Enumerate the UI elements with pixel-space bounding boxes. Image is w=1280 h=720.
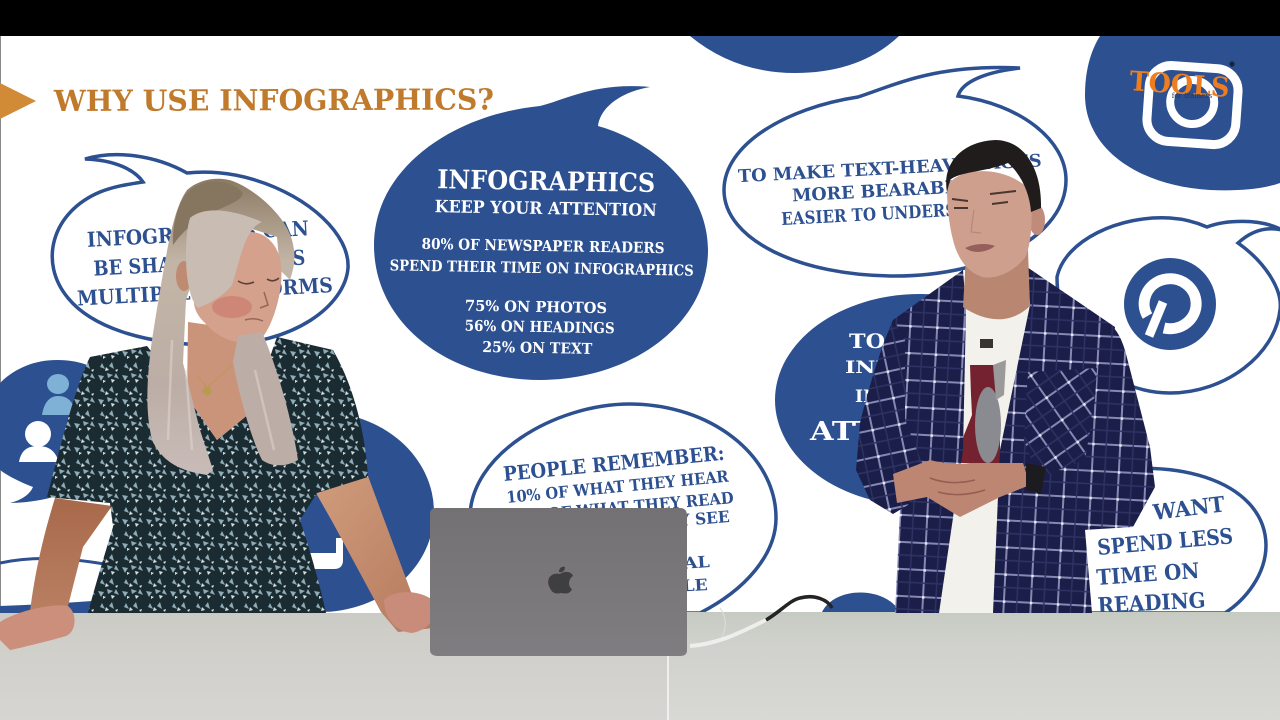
bubble: lower left partial bbox=[0, 558, 110, 614]
icon: users bbox=[19, 374, 76, 462]
bubble text: 80% OF WHAT THEY SEE bbox=[510, 507, 730, 543]
eyes bbox=[238, 278, 279, 284]
bubble text: READING bbox=[1097, 588, 1206, 619]
person: man bbox=[856, 140, 1155, 613]
forearms and hands bbox=[893, 460, 1030, 517]
hair bbox=[147, 179, 294, 475]
bubble text bbox=[388, 164, 695, 360]
sleeve: right bbox=[1040, 318, 1155, 530]
bubble text: 20% OF WHAT THEY READ bbox=[508, 488, 734, 527]
hair: bang bbox=[186, 210, 262, 308]
hair: crown bbox=[173, 182, 243, 245]
icon: pinterest bbox=[1124, 258, 1216, 350]
hair bbox=[946, 140, 1041, 212]
bubble text: TO bbox=[849, 329, 885, 353]
necklace bbox=[198, 365, 232, 396]
bubble text: EASIER TO UNDERSTAND bbox=[781, 198, 1006, 230]
arrow marker bbox=[0, 83, 36, 119]
nose bbox=[971, 210, 981, 233]
dress bbox=[47, 337, 368, 613]
bubble text: IN bbox=[855, 387, 879, 407]
bubble text bbox=[73, 215, 333, 310]
bubble: pinterest bbox=[1057, 218, 1280, 393]
cheek bbox=[212, 296, 252, 318]
top black bar bbox=[0, 0, 1280, 36]
bubble text: INF bbox=[845, 358, 891, 378]
bubble: spend less time bbox=[1075, 468, 1266, 619]
bubble: shared on multiple platforms bbox=[52, 155, 348, 345]
mouth bbox=[965, 244, 995, 252]
bubble: attention bbox=[775, 294, 1065, 506]
bubble: bottom center fragment bbox=[822, 592, 900, 612]
table bbox=[0, 612, 1280, 720]
t-shirt bbox=[938, 307, 1030, 613]
bubble text: PEOPLE REMEMBER: bbox=[502, 441, 725, 486]
bubble text: SPEND LESS bbox=[1096, 524, 1234, 561]
person: woman bbox=[0, 179, 437, 650]
bubble text: 80% OF NEWSPAPER READERS bbox=[421, 235, 665, 257]
bubble text: 75% ON PHOTOS bbox=[465, 297, 607, 317]
bubble text: VISUAL bbox=[633, 552, 710, 576]
icon fragment bbox=[300, 538, 343, 569]
logo: tools: for trainers bbox=[1172, 92, 1213, 100]
bubble: instagram bbox=[1085, 36, 1280, 190]
face bbox=[947, 171, 1032, 278]
bubble text bbox=[809, 329, 891, 447]
neck and chest bbox=[187, 322, 250, 440]
icon: instagram bbox=[1145, 64, 1240, 146]
bubble text: SPEND THEIR TIME ON INFOGRAPHICS bbox=[390, 256, 694, 280]
bubble: social users bbox=[0, 360, 90, 503]
bubble text: TO MAKE TEXT-HEAVY PAGES bbox=[738, 151, 1042, 187]
bubble text: KEEP YOUR ATTENTION bbox=[435, 197, 657, 221]
bubble: people remember bbox=[470, 404, 776, 613]
sleeve: left bbox=[856, 320, 925, 514]
shirt: left panel bbox=[885, 270, 966, 613]
bubble: keep your attention bbox=[374, 86, 708, 380]
pocket: right bbox=[1024, 368, 1110, 478]
bubble: behind woman bbox=[206, 412, 434, 612]
hair: right strand bbox=[233, 332, 298, 465]
bubble text: MULTIPLE PLATFORMS bbox=[76, 273, 333, 310]
bubble text: INFOGRAPHICS bbox=[437, 165, 655, 199]
face bbox=[194, 232, 282, 343]
hand: left bbox=[0, 605, 75, 650]
bubble text: MORE BEARABLE & bbox=[792, 176, 993, 206]
bubble text: INFOGRAPHICS CAN bbox=[86, 216, 309, 252]
bubble: top partial bbox=[690, 36, 899, 73]
bubble text bbox=[738, 151, 1045, 232]
left arm bbox=[30, 498, 112, 612]
nose and mouth bbox=[245, 292, 268, 321]
bubble text: WANT bbox=[1151, 492, 1226, 526]
bubble text: PEOPLE bbox=[627, 575, 708, 598]
cable bbox=[690, 597, 832, 646]
bubble text bbox=[1096, 492, 1234, 619]
neck bbox=[963, 250, 1030, 319]
bubble text: TIME ON bbox=[1096, 559, 1200, 591]
bubble text: 56% ON HEADINGS bbox=[465, 317, 615, 337]
shirt: right panel bbox=[993, 267, 1115, 613]
apple logo bbox=[548, 567, 573, 594]
ear bbox=[176, 261, 192, 291]
bubble text bbox=[502, 441, 734, 598]
right arm bbox=[316, 476, 437, 632]
watch bbox=[1026, 463, 1046, 494]
bubble text: 10% OF WHAT THEY HEAR bbox=[506, 467, 730, 507]
title: WHY USE INFOGRAPHICS? bbox=[53, 82, 494, 118]
shirt print bbox=[957, 339, 1006, 463]
bubble text: 25% ON TEXT bbox=[482, 338, 593, 358]
hand: right bbox=[384, 592, 437, 633]
laptop bbox=[430, 508, 687, 656]
ear bbox=[1029, 205, 1045, 235]
bubble: text-heavy pages bbox=[724, 68, 1066, 276]
bubble text: ATT bbox=[809, 417, 877, 447]
eyebrows and eyes bbox=[952, 191, 1016, 208]
logo: tools: TOOLS bbox=[1129, 66, 1230, 104]
bubble text: BE SHARED ACROSS bbox=[93, 246, 306, 281]
